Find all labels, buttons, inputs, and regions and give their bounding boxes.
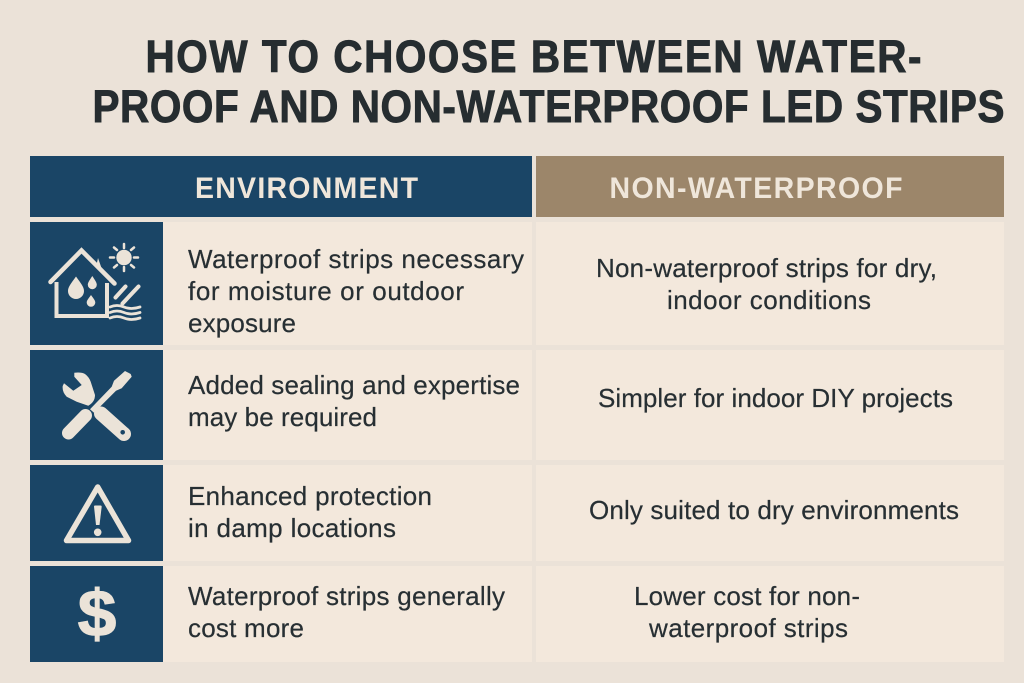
text: sealing [188, 370, 520, 432]
text: sealing: may be required [188, 402, 377, 432]
text: moisture: for moisture or outdoor [188, 276, 464, 306]
title: PROOF AND NON-WATERPROOF LED STRIPS [92, 82, 1004, 133]
row 4: non-waterproof: Lower cost for non- [634, 581, 860, 611]
row 3: non-waterproof: Only suited to dry environments [589, 495, 959, 525]
text: protection: Enhanced protection [188, 481, 432, 511]
text: moisture: exposure [188, 308, 296, 338]
text: moisture [188, 244, 524, 338]
header: non-waterproof [536, 156, 1004, 217]
row 4: environment [30, 566, 532, 662]
icon: dollar sign: $ [78, 577, 116, 651]
text: cost: Waterproof strips generally [188, 581, 505, 611]
row 1: non-waterproof: indoor conditions [667, 285, 871, 315]
row 1: environment [30, 222, 532, 345]
text: protection [188, 481, 432, 543]
row 4: non-waterproof: waterproof strips [648, 613, 848, 643]
header: environment: ENVIRONMENT [195, 172, 418, 205]
text: moisture: Waterproof strips necessary [188, 244, 524, 274]
title: HOW TO CHOOSE BETWEEN WATER- [146, 32, 922, 83]
icon: house with water drops, sun and waves [50, 244, 140, 320]
row 3: non-waterproof [536, 465, 1004, 561]
title [92, 32, 1004, 133]
text: sealing: Added sealing and expertise [188, 370, 520, 400]
header: environment [30, 156, 532, 217]
header: non-waterproof: NON-WATERPROOF [610, 172, 902, 205]
row 4: non-waterproof [536, 566, 1004, 662]
row 1: non-waterproof [536, 222, 1004, 345]
text: cost [188, 581, 505, 643]
icon: wrench and screwdriver [63, 371, 132, 435]
row 3: environment [30, 465, 532, 561]
text: protection: in damp locations [188, 513, 396, 543]
text: cost: cost more [188, 613, 304, 643]
row 2: environment [30, 350, 532, 460]
row 1: non-waterproof: Non-waterproof strips for dry, [596, 253, 937, 283]
row 2: non-waterproof: Simpler for indoor DIY projects [598, 383, 953, 413]
icon: warning triangle [66, 487, 128, 540]
row 2: non-waterproof [536, 350, 1004, 460]
